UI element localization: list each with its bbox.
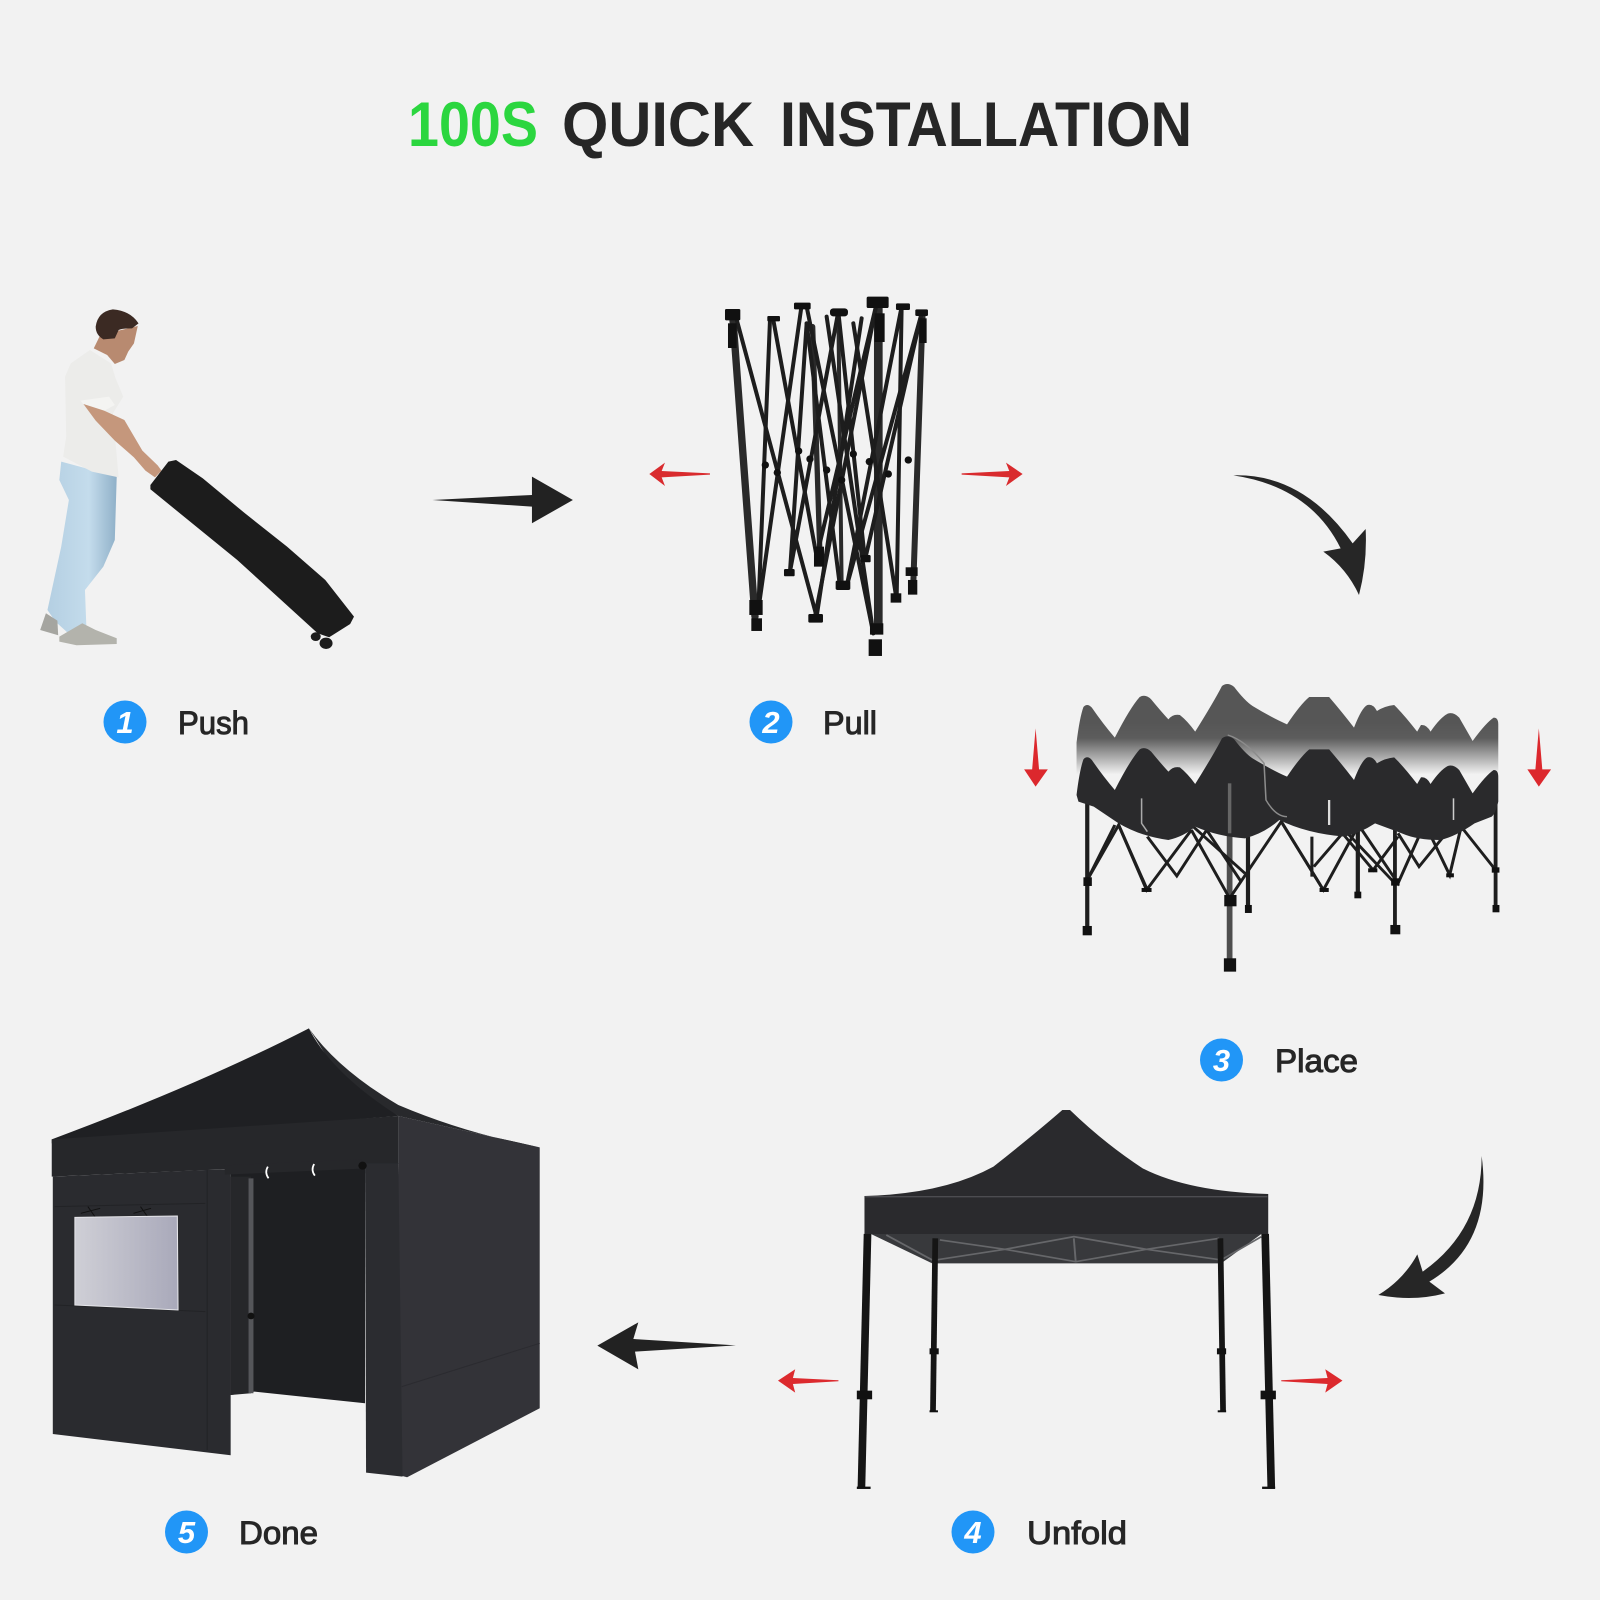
main frame poles — [733, 303, 923, 630]
man figure — [40, 309, 161, 645]
clear window — [75, 1216, 178, 1310]
label: step 3 Place: 3 — [1213, 1043, 1230, 1078]
title: INSTALLATION — [780, 90, 1192, 160]
title: 100S — [408, 90, 538, 160]
label: step 1 Push — [104, 700, 249, 744]
red arrow: unfold right — [1281, 1369, 1342, 1393]
label: step 1 Push: Push — [178, 705, 249, 741]
canopy seam highlights — [1142, 735, 1453, 833]
label: step 1 Push: 1 — [116, 705, 134, 740]
illustration: finished tent with walls — [52, 1028, 540, 1477]
scissor trusses — [735, 303, 922, 633]
door jamb panel — [231, 1177, 251, 1395]
label: step 2 Pull: Pull — [823, 705, 877, 741]
curved arrow: step 2 to step 3 — [1233, 475, 1366, 595]
right front panel — [365, 1163, 403, 1477]
title — [408, 90, 1192, 160]
label: step 4 Unfold — [952, 1510, 1127, 1554]
tent legs — [861, 1234, 1271, 1488]
illustration: canopy being placed on frame — [1077, 684, 1499, 972]
wall seams — [55, 1170, 540, 1450]
label: step 3 Place — [1200, 1038, 1358, 1082]
frame joints and feet — [725, 297, 928, 656]
right side wall — [398, 1116, 540, 1477]
label: step 2 Pull: 2 — [761, 705, 780, 740]
red arrow: unfold left — [778, 1369, 838, 1393]
label: step 5 Done: Done — [239, 1515, 318, 1551]
label: step 5 Done: 5 — [178, 1515, 196, 1550]
front valance — [52, 1116, 398, 1177]
label: step 3 Place: Place — [1275, 1043, 1358, 1079]
tent roof and valance — [864, 1110, 1268, 1234]
label: step 5 Done — [165, 1510, 318, 1554]
red arrow: pull left — [649, 463, 710, 486]
tent underside and frame — [871, 1234, 1261, 1263]
illustration: folded tent frame — [725, 297, 928, 656]
roof front slope — [52, 1028, 398, 1143]
arrow: step 1 to step 2 — [432, 477, 573, 523]
left front wall — [53, 1169, 231, 1455]
red arrow: press down right — [1527, 728, 1551, 787]
door opening interior — [231, 1163, 365, 1403]
red arrow: press down left — [1024, 728, 1048, 787]
red arrow: pull right — [962, 463, 1023, 486]
frame feet — [1083, 867, 1499, 972]
lower canopy fabric — [1077, 736, 1498, 840]
roof side slope — [309, 1028, 540, 1147]
illustration: man pushing wheeled bag — [40, 309, 354, 649]
interior pole and rolled door — [225, 1162, 367, 1393]
label: step 4 Unfold: 4 — [963, 1515, 982, 1550]
title: QUICK — [562, 90, 754, 160]
leg clamps and feet — [857, 1348, 1276, 1489]
curved arrow: step 3 to step 4 — [1378, 1156, 1483, 1298]
frame legs and scissor trusses — [1087, 783, 1496, 968]
label: step 4 Unfold: Unfold — [1027, 1515, 1127, 1551]
arrow: step 4 to step 5 — [597, 1322, 736, 1369]
illustration: unfolded canopy tent — [857, 1110, 1276, 1489]
label: step 2 Pull — [750, 700, 877, 744]
rolling bag — [150, 460, 354, 649]
raised canopy ghost — [1077, 684, 1498, 778]
